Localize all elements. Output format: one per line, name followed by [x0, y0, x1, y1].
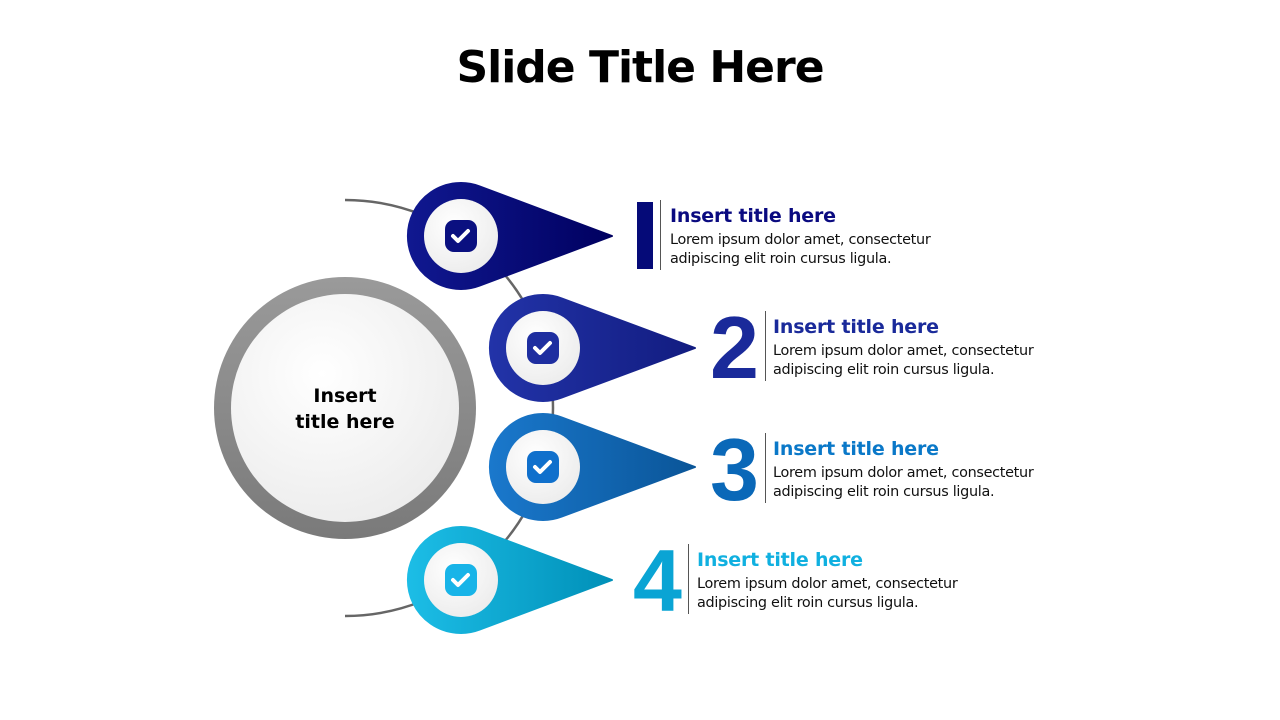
- text 4: [697, 576, 958, 611]
- title: Slide Title Here: [456, 42, 824, 93]
- text 2: adipiscing elit roin cursus ligula.: [773, 362, 994, 378]
- icon: check 3: [527, 451, 559, 483]
- text 1: Lorem ipsum dolor amet, consectetur: [670, 232, 930, 248]
- text 2: Lorem ipsum dolor amet, consectetur: [773, 343, 1033, 359]
- icon: check 4: [445, 564, 477, 596]
- item 4: [633, 531, 958, 630]
- number 2: 2: [710, 298, 759, 397]
- pin 4: [408, 527, 612, 633]
- pin 3: [490, 414, 695, 520]
- number 4: 4: [633, 531, 682, 630]
- item 3: [710, 420, 1034, 519]
- title 1: Insert title here: [670, 205, 836, 227]
- text 4: adipiscing elit roin cursus ligula.: [697, 595, 918, 611]
- text 3: [773, 465, 1034, 500]
- item 1: [637, 200, 931, 270]
- text 3: Lorem ipsum dolor amet, consectetur: [773, 465, 1033, 481]
- title 2: Insert title here: [773, 316, 939, 338]
- connector arc: [345, 200, 553, 616]
- text 3: adipiscing elit roin cursus ligula.: [773, 484, 994, 500]
- text 2: [773, 343, 1034, 378]
- pin 1: [408, 183, 612, 289]
- central circle: title here: [295, 411, 395, 433]
- icon: check 1: [445, 220, 477, 252]
- text 1: adipiscing elit roin cursus ligula.: [670, 251, 891, 267]
- number 1: [637, 202, 653, 269]
- title 3: Insert title here: [773, 438, 939, 460]
- title 4: Insert title here: [697, 549, 863, 571]
- pin 2: [490, 295, 695, 401]
- central circle: [214, 277, 476, 539]
- number 3: 3: [710, 420, 759, 519]
- item 2: [710, 298, 1034, 397]
- icon: check 2: [527, 332, 559, 364]
- text 1: [670, 232, 931, 267]
- central circle: Insert: [313, 385, 377, 407]
- text 4: Lorem ipsum dolor amet, consectetur: [697, 576, 957, 592]
